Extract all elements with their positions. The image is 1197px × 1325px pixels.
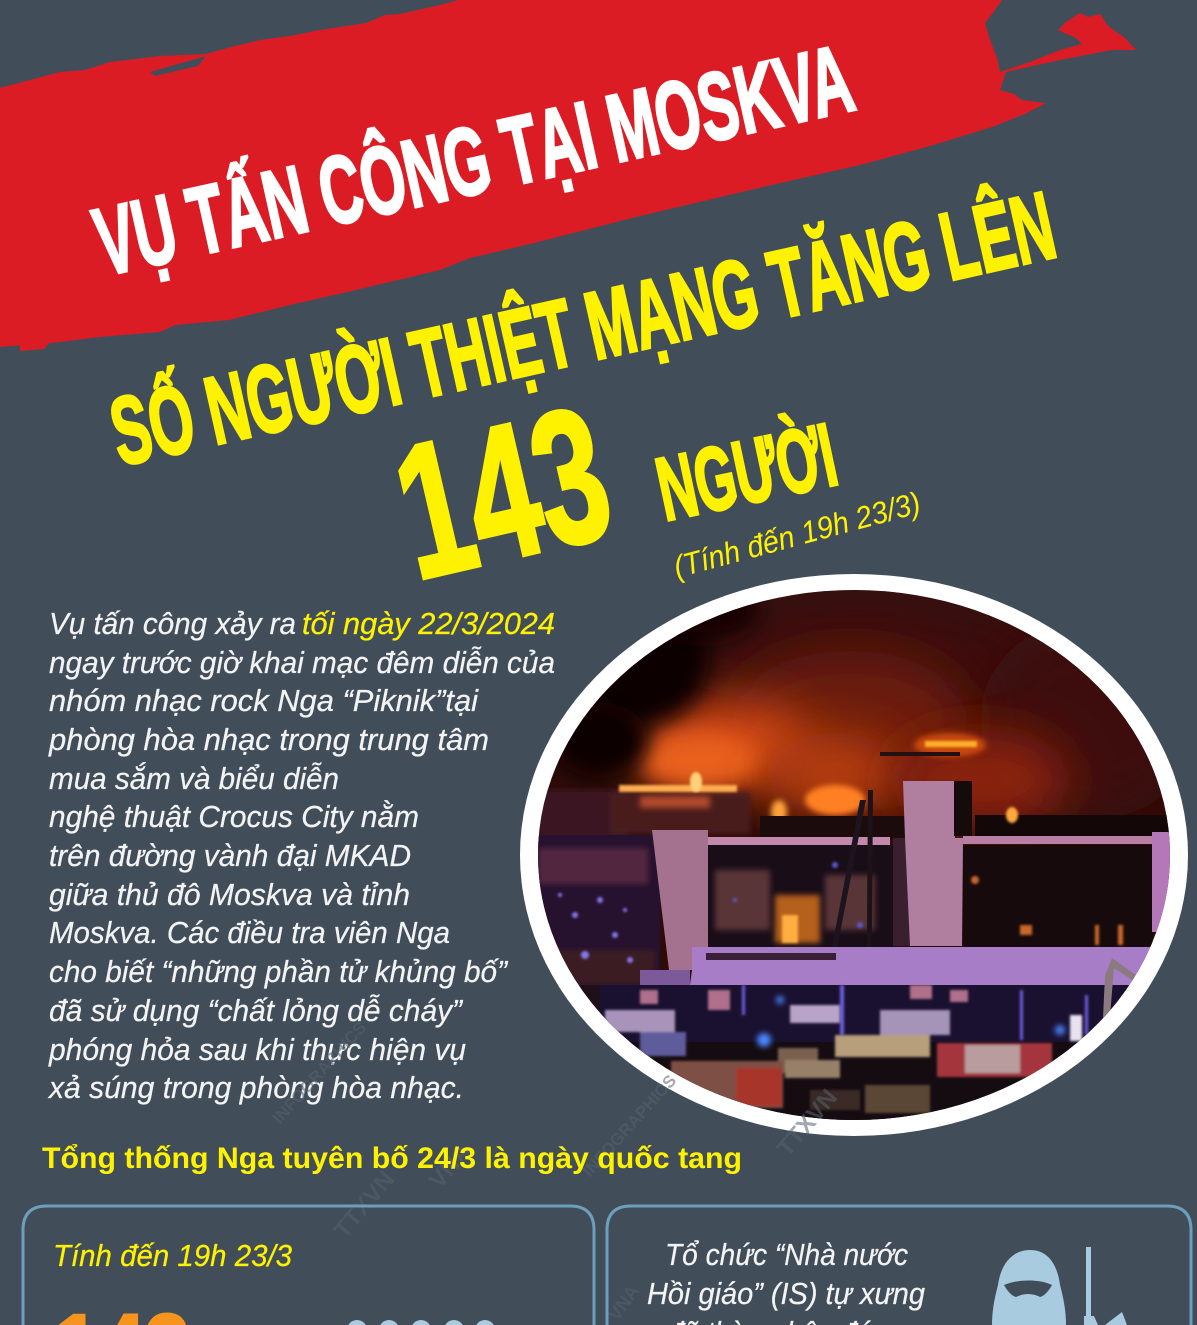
roof bands: [708, 837, 890, 845]
claim text: [647, 1237, 925, 1325]
watermarks: [269, 1018, 843, 1324]
watermarks: TTXVN: [329, 1166, 400, 1244]
mast: [867, 790, 873, 932]
upper left building: [538, 790, 628, 850]
paragraph: attack description: nhóm nhạc rock Nga “Piknik”tại: [49, 683, 479, 718]
paragraph: attack description: ngay trước giờ khai mạc đêm diễn của: [49, 645, 555, 680]
canopy: [690, 947, 1160, 985]
paragraph: attack description: tối ngày 22/3/2024: [302, 606, 555, 641]
paragraph: attack description: giữa thủ đô Moskva và tỉnh: [49, 877, 410, 912]
paragraph: attack description: trên đường vành đại MKAD: [49, 838, 411, 873]
paragraph: attack description: [47, 606, 555, 1105]
big number 143: 143: [378, 367, 628, 620]
vehicles and ground: [630, 1042, 1078, 1120]
left crowd and lights: [530, 835, 660, 1005]
panel: IS claim: [607, 1206, 1191, 1325]
national mourning line: Tổng thống Nga tuyên bố 24/3 là ngày quốc tang: [42, 1142, 742, 1175]
label: people: NGƯỜI: [648, 404, 845, 541]
paragraph: attack description: nghệ thuật Crocus City nằm: [49, 799, 419, 834]
watermarks: VNA: [605, 1282, 643, 1324]
paragraph: attack description: phòng hòa nhạc trong trung tâm: [48, 722, 489, 757]
as-of date: Tính đến 19h 23/3: [53, 1238, 292, 1273]
time note: (Tính đến 19h 23/3): [670, 485, 924, 585]
watermarks: TTXVN: [772, 1084, 843, 1162]
panel: casualty count: [23, 1206, 594, 1325]
paragraph: attack description: phóng hỏa sau khi thực hiện vụ: [48, 1032, 466, 1067]
paragraph: attack description: xả súng trong phòng hòa nhạc.: [47, 1070, 464, 1105]
paragraph: attack description: Moskva. Các điều tra viên Nga: [49, 915, 450, 950]
people dots: [347, 1320, 495, 1325]
paragraph: attack description: mua sắm và biểu diễn: [49, 761, 339, 796]
photo: burning Crocus City Hall in white circle: [520, 570, 1197, 1140]
icon: masked gunman: [992, 1247, 1127, 1325]
watermarks: INFOGRAPHICS: [269, 1018, 370, 1128]
red brush banner: [0, 0, 1136, 351]
claim text: Hồi giáo” (IS) tự xưng: [647, 1276, 925, 1311]
watermarks: VNA: [424, 1138, 477, 1194]
claim text: Tổ chức “Nhà nước: [665, 1237, 908, 1272]
under canopy: [600, 985, 1170, 1055]
paragraph: attack description: cho biết “những phần tử khủng bố”: [49, 954, 509, 989]
glass facades: [708, 845, 898, 947]
wedge and tower: [652, 830, 708, 970]
paragraph: attack description: đã sử dụng “chất lỏng dễ cháy”: [49, 993, 464, 1028]
watermarks: INFOGRAPHICS: [579, 1071, 680, 1181]
paragraph: attack description: Vụ tấn công xảy ra: [49, 606, 296, 641]
